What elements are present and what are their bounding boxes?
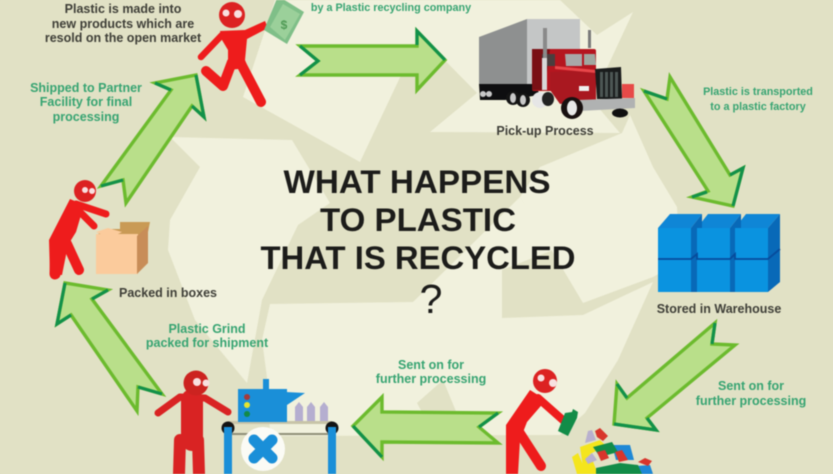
- label: plastic grind: Plastic Grind: [168, 322, 246, 336]
- label: made into new products: resold on the open market: [45, 31, 202, 45]
- arrow: grinder to boxes: [57, 283, 162, 411]
- label: shipped to partner: [30, 81, 142, 124]
- icon: grinder machine: [222, 379, 338, 474]
- icon: green bottle: [558, 409, 578, 436]
- icon: money: $: [281, 18, 288, 32]
- arrow: recycler to truck: [300, 31, 445, 90]
- label: sent on right: [696, 379, 806, 408]
- label: made into new products: new products which are: [52, 17, 194, 31]
- icon: warehouse blue boxes: [658, 214, 780, 292]
- label: plastic grind: packed for shipment: [146, 336, 269, 350]
- label: made into new products: [45, 2, 202, 45]
- label: transported to factory: [703, 86, 813, 113]
- icon: truck: [479, 19, 635, 119]
- icon: money: [264, 0, 304, 44]
- label: recycling company: by a Plastic recycling company: [311, 2, 471, 14]
- label: pick-up process: Pick-up Process: [496, 124, 594, 138]
- title: TO PLASTIC: [320, 202, 516, 238]
- title: [260, 164, 576, 322]
- title: ?: [420, 276, 442, 322]
- label: sent on middle: Sent on for: [398, 358, 464, 372]
- label: sent on middle: further processing: [376, 372, 486, 386]
- icon: pile of plastic: [572, 428, 653, 474]
- arrow: boxes to market: [101, 75, 204, 203]
- label: sent on right: further processing: [696, 394, 806, 408]
- label: packed in boxes: Packed in boxes: [119, 286, 217, 300]
- title: WHAT HAPPENS: [284, 164, 550, 200]
- icon: cardboard box: [96, 222, 150, 274]
- figure: person with money: [201, 2, 268, 102]
- figure: person bending with bottle: [506, 369, 564, 474]
- label: shipped to partner: processing: [53, 110, 119, 124]
- arrow: warehouse to sorting: [614, 323, 735, 430]
- figure: person at grinder: [158, 370, 228, 474]
- label: made into new products: Plastic is made into: [65, 2, 182, 16]
- label: plastic grind: [146, 322, 269, 350]
- figure: person packing: [49, 180, 106, 275]
- arrow: sorting to grinder: [353, 397, 498, 457]
- label: transported to factory: Plastic is transported: [703, 86, 813, 98]
- title: THAT IS RECYCLED: [260, 240, 576, 276]
- label: sent on middle: [376, 358, 486, 386]
- label: stored in warehouse: Stored in Warehouse: [657, 302, 781, 316]
- label: transported to factory: to a plastic factory: [710, 101, 806, 113]
- arrow: truck to warehouse: [644, 77, 743, 206]
- label: shipped to partner: Shipped to Partner: [30, 81, 142, 95]
- label: shipped to partner: Facility for final: [40, 95, 132, 109]
- label: sent on right: Sent on for: [718, 379, 784, 393]
